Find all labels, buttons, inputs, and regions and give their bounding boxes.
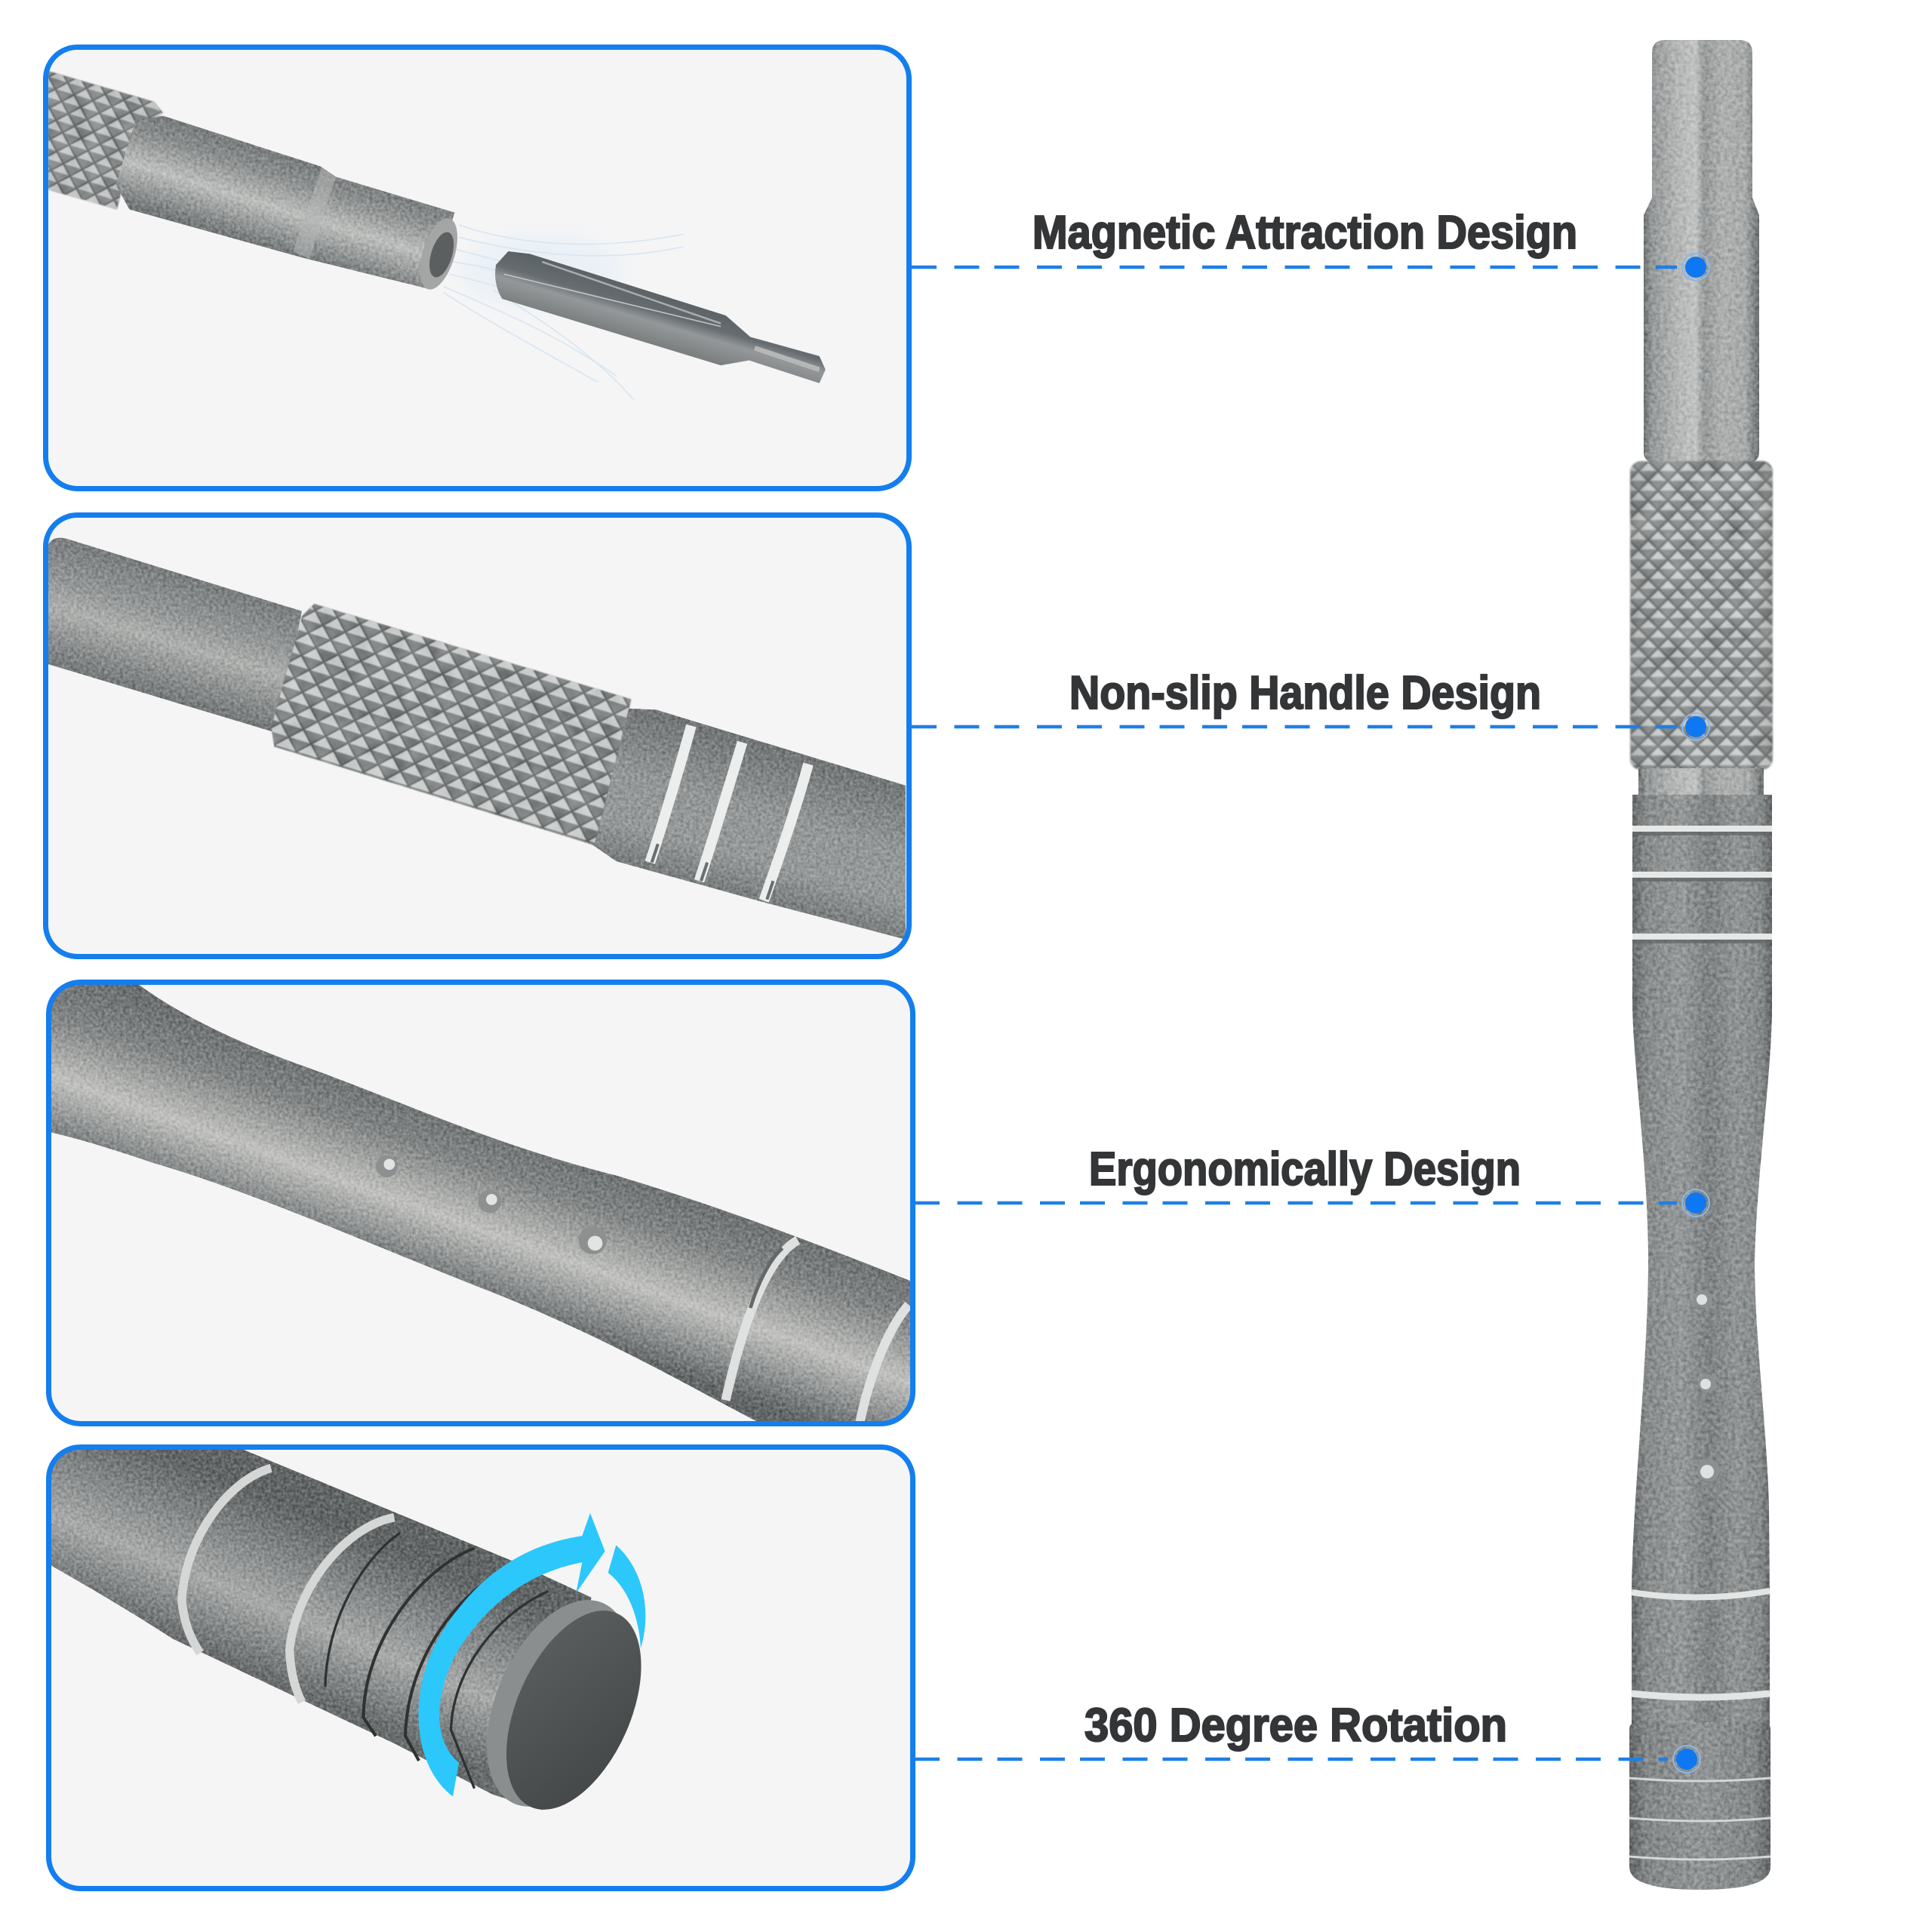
tapered shaft — [37, 978, 924, 1441]
socket opening — [420, 218, 457, 290]
grip dimples — [376, 1155, 607, 1254]
panel: magnetic attraction detail — [45, 47, 909, 489]
neck and banded collar — [1632, 768, 1772, 1010]
callout: non-slip handle — [912, 667, 1709, 740]
grooved end cap — [1629, 1722, 1770, 1890]
chrome rings and grooves — [182, 1468, 549, 1789]
chrome rings — [726, 1240, 909, 1425]
marker dot — [1682, 1189, 1709, 1217]
panel: non-slip handle detail — [45, 515, 909, 957]
rotation arrow: return sweep — [608, 1545, 645, 1648]
tapered body — [1632, 1008, 1772, 1725]
body dimples — [1694, 1290, 1720, 1481]
socket tip — [1644, 40, 1759, 465]
label: Ergonomically Design — [1089, 1143, 1521, 1195]
leader line — [912, 266, 1677, 269]
banded collar — [592, 709, 906, 940]
callout: 360 degree rotation — [915, 1700, 1700, 1773]
magnetic field lines — [444, 225, 684, 401]
rotation arrow: main sweep — [418, 1513, 605, 1796]
collar rings — [1632, 826, 1772, 943]
handle knurl section — [48, 71, 163, 210]
marker dot — [1682, 254, 1709, 281]
full screwdriver — [1629, 40, 1773, 1890]
marker dot — [1682, 713, 1709, 740]
callout: magnetic attraction — [912, 207, 1709, 281]
end cap — [487, 1600, 641, 1810]
callout: ergonomic design — [915, 1143, 1709, 1217]
label: Magnetic Attraction Design — [1032, 207, 1577, 259]
panel: ergonomic shaft detail — [37, 978, 924, 1441]
panel: 360 degree rotation detail — [37, 1444, 912, 1888]
leader line — [912, 725, 1677, 728]
label: 360 Degree Rotation — [1084, 1700, 1507, 1752]
chrome rings — [650, 726, 808, 900]
knurled grip — [1630, 461, 1773, 770]
handle shaft — [48, 538, 302, 733]
marker dot — [1673, 1746, 1700, 1773]
knurled grip — [271, 604, 632, 845]
body rings — [1632, 1591, 1770, 1697]
screwdriver bit — [495, 251, 826, 383]
label: Non-slip Handle Design — [1069, 667, 1541, 719]
socket shaft — [115, 115, 454, 290]
handle shaft — [37, 1444, 592, 1810]
leader line — [915, 1758, 1668, 1761]
socket ridge — [294, 168, 336, 259]
leader line — [915, 1201, 1677, 1204]
